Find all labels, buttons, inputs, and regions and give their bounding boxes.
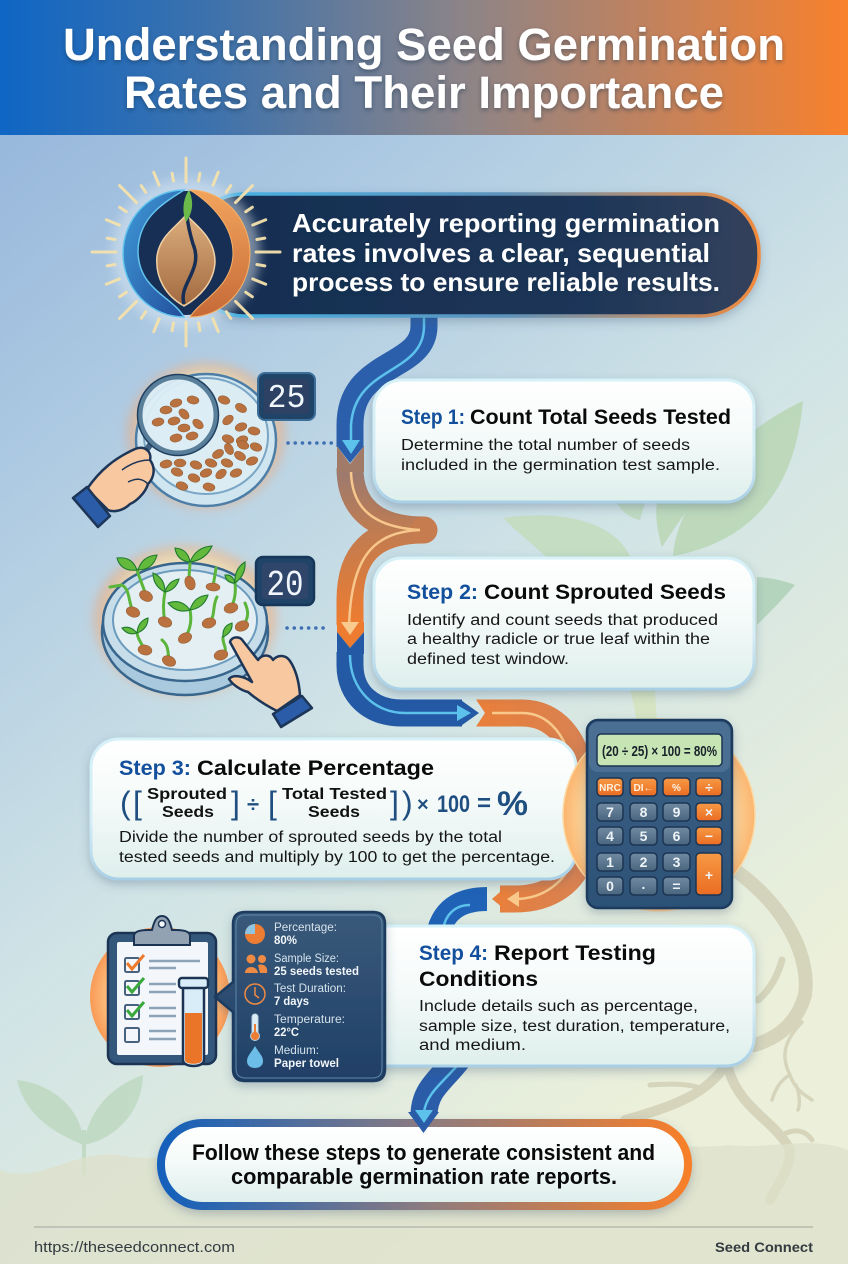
step 1 heading: Count Total Seeds Tested — [470, 406, 731, 429]
flow arrow: step 4 to summary — [424, 1056, 462, 1114]
step 2 text — [407, 612, 718, 668]
step 3 heading — [119, 757, 434, 780]
clipboard — [108, 933, 216, 1064]
medium item — [274, 1045, 339, 1070]
percentage formula: ( — [120, 785, 131, 821]
magnifier — [132, 374, 218, 470]
calculator key labels: 4 — [606, 828, 614, 844]
sample size item: Sample Size: — [274, 953, 339, 965]
counter: 25: 25 — [268, 380, 306, 417]
calculator key labels: ÷ — [705, 779, 713, 795]
connector dots 1 — [288, 441, 332, 445]
step 2 text: a healthy radicle or true leaf within the — [407, 631, 710, 648]
illustration: petri dish with magnifier — [73, 363, 288, 527]
counter: 20: 20 — [266, 565, 304, 606]
flow arrow: step 1 to step 2 — [337, 446, 438, 648]
calculator key labels: 3 — [673, 854, 681, 870]
closing text: Follow these steps to generate consistent and — [192, 1140, 655, 1165]
icon: pie chart — [245, 924, 265, 944]
temperature item: Temperature: — [274, 1014, 345, 1026]
temperature item — [274, 1014, 345, 1039]
arrowhead: step 4 to summary — [408, 1110, 439, 1133]
step 3 text: Divide the number of sprouted seeds by the total — [119, 829, 502, 846]
calculator key labels: . — [642, 876, 645, 892]
calculator key labels: 0 — [606, 878, 614, 894]
step 2 text: Identify and count seeds that produced — [407, 612, 718, 629]
calculator display — [597, 734, 722, 766]
header banner — [0, 0, 848, 135]
closing text — [192, 1140, 655, 1189]
percentage formula: [ — [268, 785, 277, 821]
panel: step 3 — [91, 739, 576, 879]
sample size item: 25 seeds tested — [274, 966, 359, 978]
step 4 heading: Step 4: — [419, 942, 488, 965]
background roots — [625, 870, 812, 1200]
calculator keys — [597, 778, 722, 895]
step 3 heading: Calculate Percentage — [197, 757, 434, 780]
footer brand: Seed Connect — [715, 1239, 813, 1255]
calculator display: (20 ÷ 25) × 100 = 80% — [602, 743, 717, 760]
panel: step 1 — [374, 380, 754, 502]
seed shape — [157, 215, 215, 306]
percentage item: 80% — [274, 935, 297, 947]
calculator glow — [563, 719, 755, 911]
title: Understanding Seed Germination — [63, 19, 785, 70]
percentage formula — [120, 785, 528, 823]
step 4 text: Include details such as percentage, — [419, 998, 698, 1015]
test duration item — [274, 983, 346, 1008]
calculator key labels: 2 — [640, 854, 648, 870]
test duration item: Test Duration: — [274, 983, 346, 995]
calculator key labels: 1 — [606, 854, 614, 870]
panel: closing summary — [157, 1119, 692, 1210]
flow arrow: calculator to step 4 — [437, 899, 487, 940]
icon: calculator — [587, 720, 732, 908]
step 3 text: tested seeds and multiply by 100 to get the percentage. — [119, 849, 555, 866]
medium item: Paper towel — [274, 1058, 339, 1070]
petri dish — [102, 569, 268, 695]
flow arrow: calculator loop — [476, 700, 580, 912]
percentage formula: ) — [402, 785, 413, 821]
percentage formula: × — [417, 794, 429, 816]
panel: step 4 — [340, 926, 754, 1066]
illustration: clipboard and test tube — [90, 916, 230, 1067]
icon: clock — [245, 984, 265, 1004]
panel: test conditions summary — [215, 912, 385, 1081]
footer url: https://theseedconnect.com — [34, 1239, 235, 1256]
calculator key labels: × — [705, 804, 713, 820]
step 3 heading: Step 3: — [119, 757, 191, 780]
step 1 text: Determine the total number of seeds — [401, 437, 690, 454]
step 1 heading: Step 1: — [401, 406, 465, 429]
counter: 25 — [258, 373, 315, 420]
seeds — [159, 394, 263, 492]
temperature item: 22°C — [274, 1027, 299, 1039]
petri dish — [136, 374, 276, 506]
test duration item: 7 days — [274, 996, 309, 1008]
step 2 heading: Step 2: — [407, 581, 478, 604]
title — [63, 19, 785, 118]
percentage item: Percentage: — [274, 922, 337, 934]
background plant — [503, 401, 803, 760]
icon: thermometer — [250, 1014, 260, 1040]
intro text: Accurately reporting germination — [292, 208, 720, 238]
flow arrow: intro to step 1 — [337, 314, 424, 463]
panel: step 2 — [374, 558, 754, 689]
step 4 text: sample size, test duration, temperature, — [419, 1018, 730, 1035]
step 2 heading: Count Sprouted Seeds — [484, 581, 726, 604]
calculator key labels: 7 — [606, 804, 614, 820]
intro text: rates involves a clear, sequential — [292, 238, 710, 268]
sun rays — [92, 158, 280, 346]
step 4 text: and medium. — [419, 1037, 526, 1054]
step 4 heading: Report Testing — [494, 942, 656, 965]
intro banner — [186, 194, 759, 316]
counter: 20 — [256, 557, 314, 606]
clip — [134, 916, 190, 945]
calculator key labels: 6 — [673, 828, 681, 844]
percentage formula: 100 — [437, 791, 470, 818]
background sprout — [17, 1075, 143, 1175]
calculator key labels: 8 — [640, 804, 648, 820]
percentage formula: Sprouted — [147, 786, 227, 803]
test tube — [179, 978, 208, 1066]
step 3 text — [119, 829, 555, 866]
calculator key labels: DI← — [634, 783, 654, 794]
calculator key labels: + — [705, 867, 713, 883]
percentage item — [274, 922, 337, 947]
sample size item — [274, 953, 359, 978]
hand — [73, 448, 154, 527]
percentage formula: Total Tested — [282, 786, 387, 803]
footer — [34, 1227, 813, 1256]
emblem ring — [124, 191, 248, 315]
step 4 heading: Conditions — [419, 968, 538, 991]
percentage formula: ÷ — [247, 792, 259, 817]
percentage formula: ] — [231, 785, 240, 821]
percentage formula: [ — [133, 785, 142, 821]
step 1 text — [401, 437, 720, 474]
connector dots 2 — [287, 626, 330, 630]
step 4 heading — [419, 942, 656, 991]
calculator key labels: % — [672, 783, 681, 794]
percentage formula: Seeds — [308, 804, 360, 821]
icon: people — [245, 954, 267, 973]
closing text: comparable germination rate reports. — [231, 1164, 617, 1189]
checklist — [125, 955, 200, 1042]
intro text — [292, 208, 720, 297]
pointing hand — [229, 637, 312, 727]
illustration: petri dish with sprouts — [90, 546, 312, 727]
medium item: Medium: — [274, 1045, 319, 1057]
icon: water drop — [247, 1046, 263, 1068]
flow arrow: step 2 to calculator — [337, 632, 479, 726]
percentage formula: = — [477, 790, 491, 817]
calculator key labels: 5 — [640, 828, 648, 844]
calculator key labels: NRC — [599, 783, 621, 794]
icon: sprouting seed emblem — [92, 158, 280, 346]
calculator key labels — [599, 779, 713, 894]
percentage formula: % — [497, 785, 528, 823]
step 4 text — [419, 998, 730, 1054]
calculator key labels: = — [672, 878, 681, 894]
sprouts — [110, 546, 250, 668]
title: Rates and Their Importance — [124, 67, 724, 118]
intro text: process to ensure reliable results. — [292, 267, 720, 297]
percentage formula: Seeds — [162, 804, 214, 821]
calculator key labels: 9 — [673, 804, 681, 820]
step 1 text: included in the germination test sample. — [401, 457, 720, 474]
step 2 text: defined test window. — [407, 651, 569, 668]
soil — [0, 1143, 848, 1264]
percentage formula: ] — [390, 785, 399, 821]
calculator key labels: − — [705, 828, 713, 844]
